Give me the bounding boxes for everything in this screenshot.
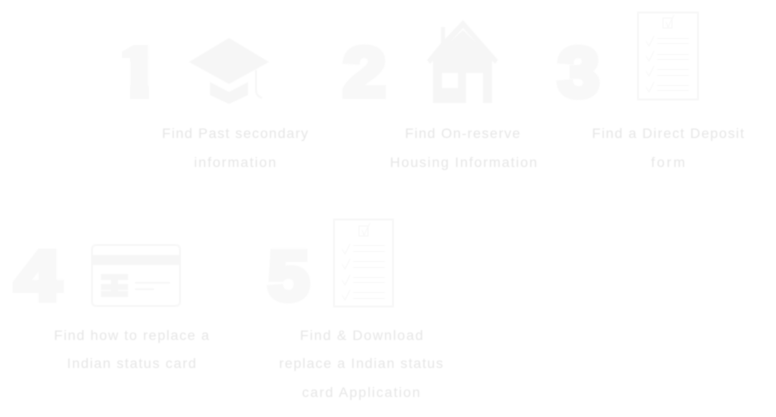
number 4: 4 — [15, 238, 61, 316]
number 1: 1 — [116, 32, 159, 111]
label: direct deposit form: Find a Direct Deposit — [592, 125, 744, 141]
label: past secondary information: Find Past secondary — [162, 125, 308, 141]
label: replace status card: Find how to replace a — [54, 327, 209, 343]
icon: checklist document — [638, 12, 698, 100]
step 2 — [343, 20, 537, 170]
label: download application: card Application — [302, 384, 420, 400]
step 5 — [268, 220, 443, 400]
label: replace status card: Indian status card — [67, 355, 196, 371]
number 3: 3 — [558, 34, 599, 112]
icon: graduation cap — [189, 38, 269, 104]
label: past secondary information: information — [194, 154, 276, 170]
label: direct deposit form: form — [651, 154, 685, 170]
icon: status card — [92, 245, 180, 306]
number 5: 5 — [268, 238, 309, 316]
label: on-reserve housing information: Find On-reserve — [405, 125, 520, 141]
label: download application: Find & Download — [300, 327, 423, 343]
label: download application: replace a Indian status — [279, 355, 443, 371]
step 4 — [15, 238, 209, 371]
step 1 — [163, 40, 308, 167]
icon: house — [427, 20, 498, 103]
label: on-reserve housing information: Housing Information — [390, 154, 537, 170]
number 2: 2 — [343, 32, 386, 111]
step 3 — [558, 12, 744, 170]
icon: application document — [334, 220, 393, 306]
